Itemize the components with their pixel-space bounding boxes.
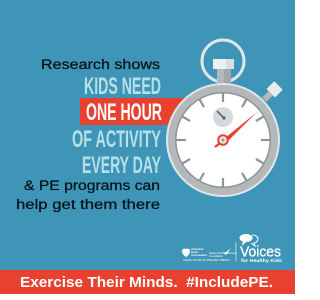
logo: american heart association: Heart [191, 250, 198, 254]
logo: voices for healthy kids: Voices [240, 244, 281, 260]
logo: voices for healthy kids [240, 234, 282, 264]
red highlight bar [80, 98, 190, 125]
logo: american heart association: Foundation [209, 254, 223, 258]
divider [234, 242, 237, 261]
logo: voices for healthy kids: for Healthy Kids [241, 258, 282, 264]
headline: kids need: KIDS NEED [84, 73, 161, 100]
bottom banner [0, 270, 295, 294]
closing text line one: & PE programs can [24, 178, 160, 193]
headline: of activity: OF ACTIVITY [72, 126, 161, 153]
logo: american heart association: American [191, 247, 204, 251]
logo: american heart association: Robert Wood Johnson [209, 251, 237, 255]
closing text line two: help get them there [16, 197, 160, 212]
logo: american heart association: Association. [191, 253, 208, 257]
headline: one hour: ONE HOUR [86, 99, 162, 126]
icon: stopwatch [166, 40, 283, 197]
headline: every day: EVERY DAY [82, 152, 161, 179]
logo: american heart association: TAKING ACTION TO PREVENT OBESITY [183, 258, 230, 262]
intro text: research shows: Research shows [41, 57, 160, 72]
bottom banner: Exercise Their Minds. #IncludePE. [20, 274, 273, 291]
logo: american heart association [182, 247, 237, 262]
